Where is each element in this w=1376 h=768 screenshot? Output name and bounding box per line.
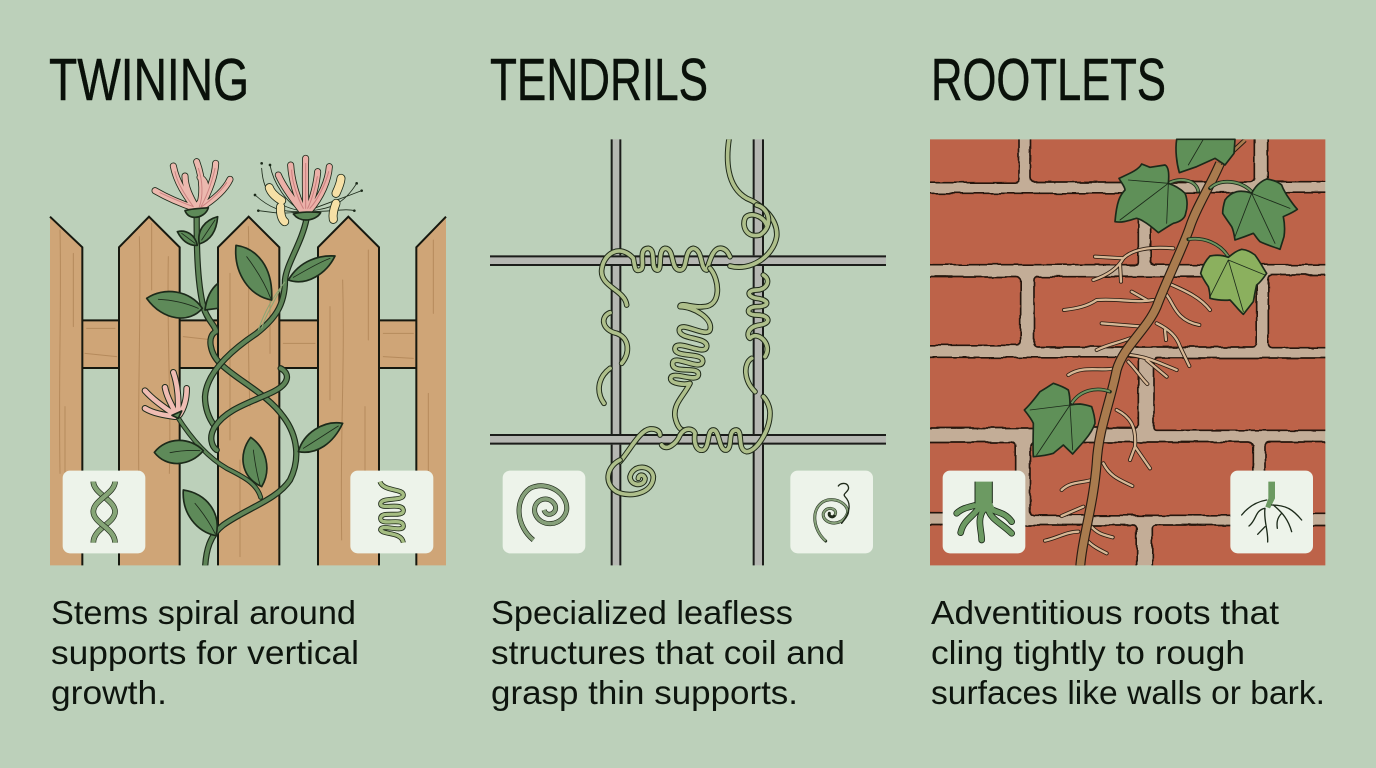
heading: twining: TWINING [49,47,249,113]
petioles [1072,180,1252,403]
description: rootlets: Adventitious roots that [931,594,1279,631]
description: tendrils: structures that coil and [491,634,845,671]
ivy leaves [1024,139,1297,457]
tendril coils [599,133,777,495]
icon card: open spiral [503,471,585,553]
icon card: spiral with curled tip [790,471,873,553]
description: tendrils: Specialized leafless [491,594,793,631]
icon card: thick roots [943,471,1025,553]
description: rootlets: cling tightly to rough [931,634,1245,671]
brick wall [923,130,1334,572]
panel: twining [49,47,446,711]
wire grid [490,139,886,565]
icon card: helical coil [350,471,433,553]
main ivy stem [1080,140,1245,570]
fence [50,217,446,565]
description: twining: growth. [51,674,167,711]
vine stems [177,215,307,570]
panel: rootlets [923,47,1334,711]
illustration: tendrils on wire grid [490,133,886,565]
leaves [147,217,343,536]
description: twining: Stems spiral around [51,594,356,631]
flower: lower left [145,372,187,418]
illustration: ivy on brick wall [923,130,1334,572]
description: tendrils: grasp thin supports. [491,674,798,711]
aerial rootlets [1045,248,1210,553]
panel: tendrils [490,47,886,711]
description: twining: supports for vertical [51,634,359,671]
illustration: honeysuckle on picket fence [50,158,446,570]
description: rootlets: surfaces like walls or bark. [931,674,1325,711]
heading: rootlets: ROOTLETS [931,47,1166,113]
icon card: twisted stems [63,471,145,553]
icon card: fine roots [1230,471,1313,553]
heading: tendrils: TENDRILS [490,47,708,113]
flower: upper left [155,162,230,217]
flower: upper right [254,158,363,222]
